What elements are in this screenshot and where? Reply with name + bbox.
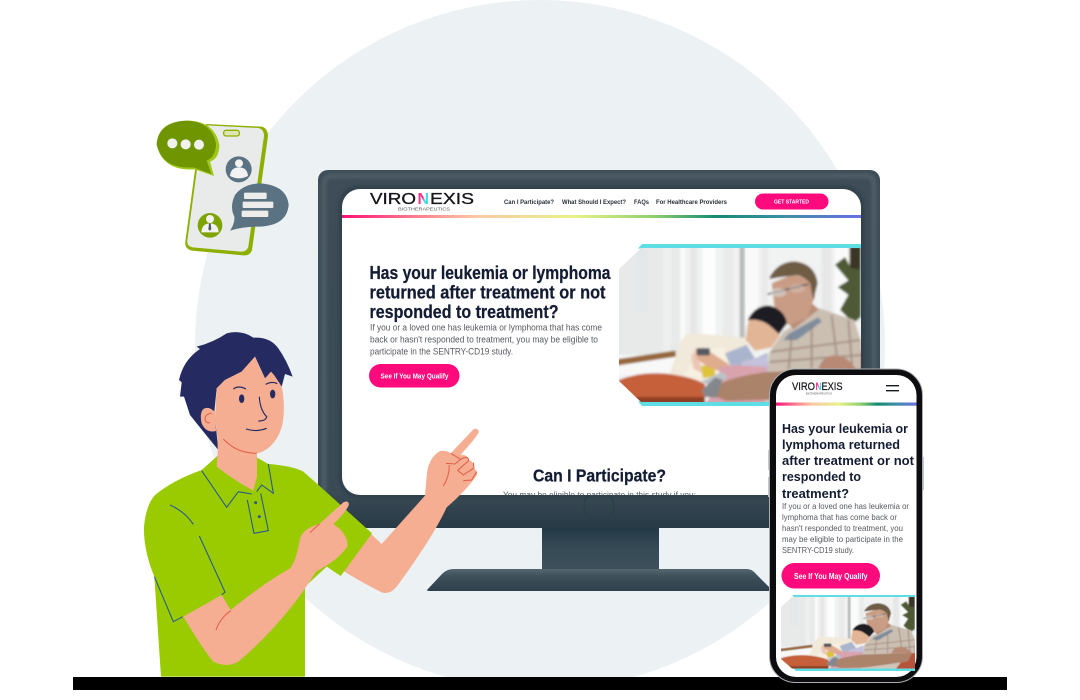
neck crease [223, 439, 257, 453]
mobile logo: VIRO [792, 381, 815, 393]
navigation links: Can I Participate? [504, 199, 554, 206]
illustrated man pointing [144, 332, 479, 677]
back arm [333, 429, 479, 593]
mobile paragraph: hasn't responded to treatment, you [782, 523, 903, 533]
grey avatar [226, 156, 252, 182]
hero photo [615, 244, 865, 406]
chat phone icon [157, 121, 289, 255]
desktop monitor [318, 170, 880, 591]
see if you may qualify button [369, 364, 460, 388]
grey speech bubble [230, 183, 289, 231]
monitor base [427, 569, 772, 591]
ear detail [205, 413, 212, 423]
shirt collar and seams [154, 464, 273, 622]
mobile heading: responded to [782, 469, 861, 484]
phone side buttons [768, 450, 924, 497]
mobile heading: treatment? [782, 486, 849, 501]
navigation links: For Healthcare Providers [656, 199, 727, 206]
navigation links [504, 200, 727, 206]
hero paragraph: If you or a loved one has leukemia or lymphoma that has come [370, 322, 602, 332]
face and neck [215, 357, 284, 491]
get started button: GET STARTED [774, 200, 809, 206]
hero heading: Has your leukemia or lymphoma [370, 263, 611, 283]
mobile phone [768, 369, 924, 682]
monitor camera ring [584, 491, 614, 521]
mobile logo: BIOTHERAPEUTICS [806, 392, 832, 396]
background circle [195, 0, 885, 690]
mobile paragraph: lymphoma that has come back or [782, 512, 897, 522]
mobile rainbow divider [776, 402, 916, 406]
hero paragraph: back or hasn't responded to treatment, you may be eligible to [370, 334, 598, 344]
mobile logo [792, 381, 842, 396]
navigation links: FAQs [634, 199, 649, 206]
pointing hand creases [443, 453, 477, 486]
hero paragraph: participate in the SENTRY-CD19 study. [370, 346, 513, 356]
get started button [755, 194, 828, 210]
can i participate heading: Can I Participate? [533, 466, 666, 486]
mobile logo: N [816, 381, 822, 393]
monitor screen [342, 189, 865, 500]
mobile paragraph: SENTRY-CD19 study. [782, 545, 854, 555]
rainbow divider [342, 215, 861, 218]
navigation links: What Should I Expect? [562, 199, 626, 206]
hero paragraph [370, 322, 602, 356]
monitor stand [542, 525, 659, 571]
site logo: N [418, 191, 429, 208]
site logo: EXIS [430, 191, 474, 208]
see if you may qualify button: See If You May Qualify [380, 372, 449, 380]
shirt [144, 456, 372, 677]
clipped intro sentence: You may be eligible to participate in this study if you: [503, 490, 696, 500]
hair [179, 332, 293, 450]
mobile heading: after treatment or not [782, 453, 915, 468]
phone case [770, 369, 922, 682]
phone screen [776, 375, 916, 677]
mobile qualify button [782, 563, 880, 588]
green speech bubble [157, 121, 219, 176]
head [179, 332, 293, 491]
hero heading [370, 263, 611, 322]
mobile paragraph [782, 501, 909, 555]
front arm creases [216, 524, 319, 630]
monitor frame [318, 170, 880, 528]
green avatar [198, 213, 222, 238]
mobile qualify button: See If You May Qualify [794, 572, 868, 581]
site logo: VIRO [370, 191, 416, 208]
ear [201, 408, 216, 431]
phone body [185, 124, 268, 255]
hero heading: returned after treatment or not [370, 282, 606, 302]
mobile heading: Has your leukemia or [782, 421, 908, 436]
mobile logo: EXIS [822, 381, 842, 393]
site logo: BIOTHERAPEUTICS [398, 206, 450, 212]
hero heading: responded to treatment? [370, 302, 558, 322]
face features [233, 382, 277, 431]
mobile photo [779, 595, 917, 671]
site logo [370, 192, 474, 210]
hamburger menu icon [886, 386, 899, 391]
mobile paragraph: If you or a loved one has leukemia or [782, 501, 909, 511]
mobile paragraph: may be eligible to participate in the [782, 534, 903, 544]
front arm and hand [183, 502, 349, 665]
mobile heading [782, 421, 915, 501]
mobile heading: lymphoma returned [782, 437, 900, 452]
ground bar [73, 677, 1007, 690]
